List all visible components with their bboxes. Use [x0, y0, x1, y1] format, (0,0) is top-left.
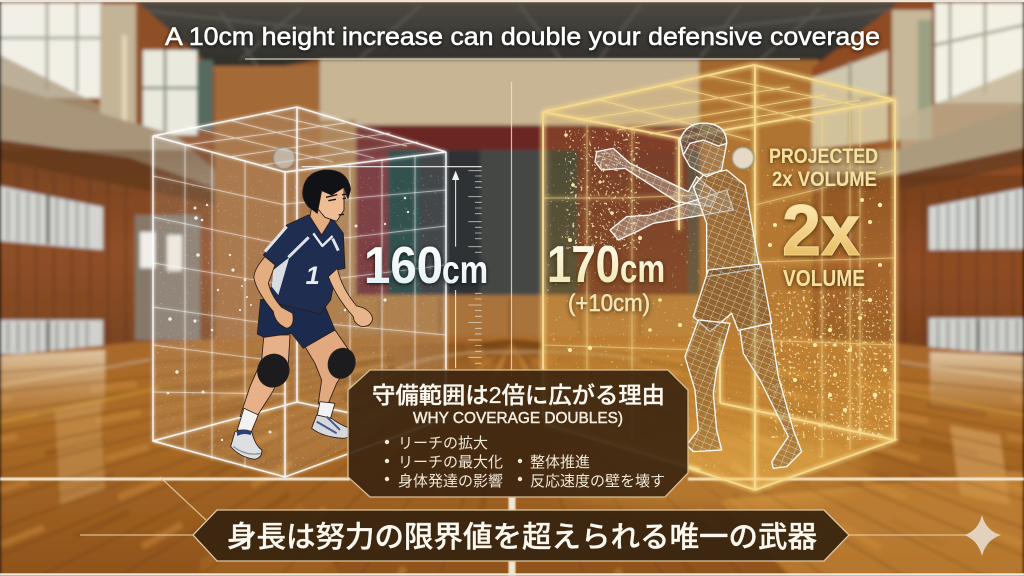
bullet list: リーチの最大化 — [398, 454, 503, 471]
centre divider — [510, 82, 512, 376]
mesh head — [680, 123, 727, 177]
right wall and windows — [810, 0, 1024, 360]
panel heading: 守備範囲は2倍に広がる理由 — [372, 382, 665, 408]
height label 160cm — [364, 237, 488, 295]
neck — [310, 207, 332, 235]
bullet list: 整体推進 — [530, 454, 590, 471]
jersey — [263, 215, 345, 314]
wireframe body fill — [595, 123, 802, 468]
projected 2x volume label: VOLUME — [783, 265, 865, 291]
wooden floor — [0, 336, 1024, 576]
wall clock right — [732, 147, 754, 169]
raised arm and hand — [595, 148, 717, 207]
height label 170cm (+10cm) — [547, 236, 665, 317]
right arm — [328, 268, 373, 327]
left leg — [240, 335, 290, 417]
jersey number: 1 — [306, 262, 320, 290]
ceiling — [130, 2, 902, 78]
mesh arms — [597, 148, 733, 240]
wall clock left — [273, 147, 295, 169]
projected 2x volume label: 2x — [782, 191, 860, 271]
eyes and brows — [326, 194, 347, 215]
lower arm and hand — [610, 190, 733, 240]
right golden volume box — [530, 65, 895, 510]
shorts — [257, 299, 335, 348]
title: A 10cm height increase can double your defensive coverage — [165, 23, 880, 51]
head — [680, 123, 727, 177]
bottom banner — [193, 510, 849, 561]
wire mesh overlay — [597, 123, 802, 468]
height label 170cm (+10cm): 170 — [547, 236, 620, 294]
right knee pad — [324, 344, 359, 382]
right shoe — [312, 415, 351, 438]
title divider line — [245, 58, 800, 60]
mesh body and legs — [685, 170, 802, 468]
right leg — [305, 330, 353, 403]
court lines — [0, 479, 1024, 576]
boy in navy volleyball uniform — [231, 170, 373, 459]
banner text: 身長は努力の限界値を超えられる唯一の武器 — [227, 521, 817, 554]
bullet list: 反応速度の壁を壊す — [530, 473, 665, 490]
bullet list: 身体発達の影響 — [398, 473, 503, 490]
height label 160cm: 160 — [364, 237, 443, 295]
ruler: height scale 160cm — [302, 167, 482, 368]
collar — [313, 233, 333, 246]
jersey stripes — [265, 227, 338, 257]
hair — [303, 170, 351, 213]
left wireframe box: 160cm volume — [153, 107, 446, 477]
projected 2x volume label: PROJECTED — [769, 145, 878, 168]
shorts — [693, 264, 772, 332]
back leg — [740, 323, 802, 468]
front leg — [685, 320, 730, 452]
height label 170cm (+10cm): cm — [620, 248, 665, 291]
panel: why coverage doubles — [348, 370, 688, 497]
torso — [693, 170, 760, 277]
jersey side panel — [272, 257, 289, 295]
left shoe — [231, 430, 262, 459]
icon: sparkle — [964, 515, 1001, 556]
back wall — [213, 60, 819, 350]
projected 2x volume label: 2x VOLUME — [772, 168, 877, 191]
bullet list: リーチの拡大 — [398, 435, 488, 452]
hair — [680, 123, 727, 155]
height label 170cm (+10cm): (+10cm) — [568, 290, 650, 317]
wireframe man: projected 170cm — [595, 123, 802, 468]
left sock — [237, 408, 258, 433]
right sock — [317, 402, 335, 420]
projected 2x volume label — [769, 145, 878, 291]
panel subheading: WHY COVERAGE DOUBLES) — [413, 410, 623, 427]
left wall and windows — [0, 0, 215, 360]
height label 160cm: cm — [442, 249, 488, 292]
left arm — [254, 257, 293, 328]
bullet list — [385, 435, 665, 490]
left knee pad — [253, 350, 294, 392]
banner connector lines — [80, 477, 965, 535]
face — [316, 183, 344, 221]
